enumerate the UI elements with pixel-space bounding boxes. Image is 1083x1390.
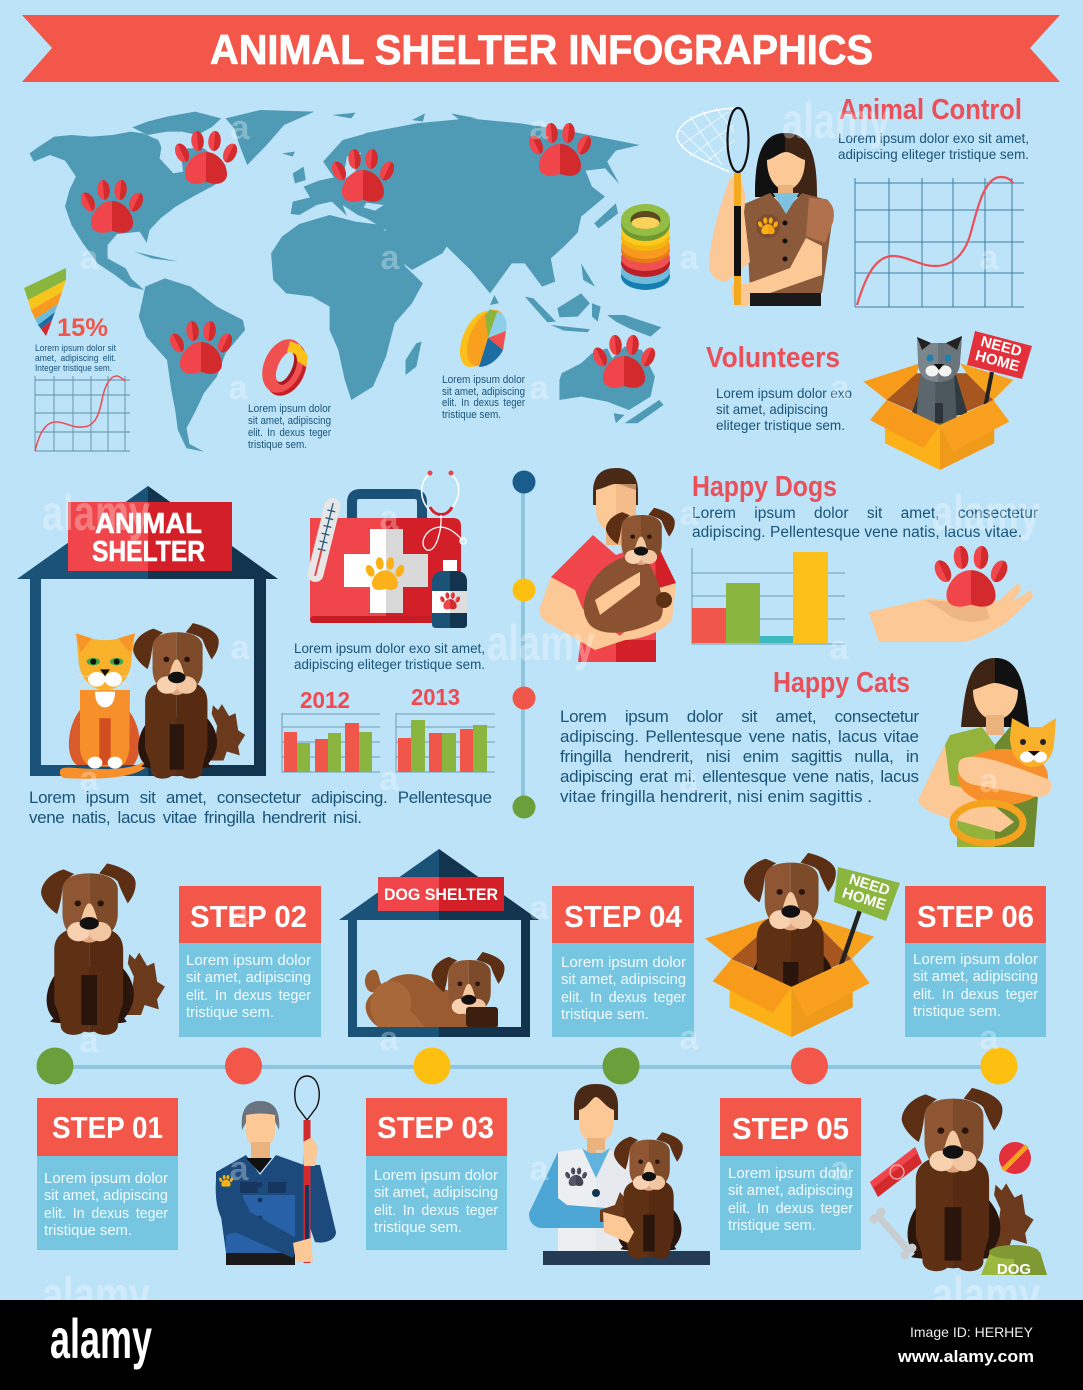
bar chart: 2013: 2013 bbox=[411, 684, 460, 710]
heading: Happy Dogs: Happy Dogs bbox=[692, 471, 837, 503]
watermarks: a bbox=[530, 369, 550, 407]
text: medical kit: Lorem ipsum dolor exo sit amet, bbox=[294, 640, 485, 656]
step 03: STEP 03 bbox=[377, 1110, 494, 1145]
heading: Animal Control: Animal Control bbox=[839, 94, 1022, 126]
step 05: Lorem ipsum dolor bbox=[728, 1166, 853, 1182]
world map bbox=[29, 110, 664, 452]
illustration: medical kit bbox=[306, 470, 467, 628]
watermarks: a bbox=[380, 760, 400, 798]
illustration: man holding dog bbox=[539, 468, 676, 662]
icon: funnel chart bbox=[24, 268, 66, 336]
watermarks: a bbox=[381, 239, 401, 277]
text: pie caption: Lorem ipsum dolor bbox=[442, 374, 525, 386]
illustration: dog in box with sign bbox=[705, 853, 900, 1037]
text: volunteers bbox=[716, 385, 852, 433]
line chart: small bbox=[35, 376, 130, 451]
text: shelter description bbox=[29, 788, 492, 827]
watermarks: a bbox=[680, 1019, 700, 1057]
watermarks: a bbox=[680, 762, 700, 800]
step 01: sit amet, adipiscing bbox=[44, 1188, 168, 1204]
text: ring caption bbox=[248, 403, 331, 451]
watermarks: a bbox=[80, 239, 100, 277]
text: funnel caption: Lorem ipsum dolor sit bbox=[35, 343, 116, 354]
step 05 bbox=[720, 1098, 861, 1250]
text: ring caption: elit. In dexus teger bbox=[248, 427, 331, 439]
illustration: dog shelter bbox=[339, 849, 539, 1037]
step 06: elit. In dexus teger bbox=[913, 987, 1038, 1003]
text: happy cats: vitae fringilla hendrerit, nisi enim sagittis . bbox=[560, 787, 872, 806]
vertical timeline bbox=[512, 470, 536, 818]
illustration: woman holding cat bbox=[918, 658, 1056, 847]
step 06: STEP 06 bbox=[917, 899, 1034, 934]
text: animal control bbox=[838, 130, 1029, 162]
illustration: dog with accessories: DOG bbox=[997, 1261, 1031, 1278]
step 05: sit amet, adipiscing bbox=[728, 1183, 853, 1199]
step 04: Lorem ipsum dolor bbox=[561, 955, 686, 971]
watermarks: alamy bbox=[42, 1267, 150, 1323]
title banner: ANIMAL SHELTER INFOGRAPHICS bbox=[210, 26, 873, 73]
watermarks: a bbox=[680, 239, 700, 277]
illustration: dog shelter: DOG SHELTER bbox=[384, 885, 498, 904]
illustration: animal shelter house: SHELTER bbox=[92, 536, 205, 568]
watermarks: alamy bbox=[932, 485, 1040, 541]
step 04: tristique sem. bbox=[561, 1007, 649, 1023]
icon: red ring chart bbox=[254, 333, 315, 402]
step 01 bbox=[37, 1098, 178, 1250]
map paw markers bbox=[78, 122, 658, 388]
stat: 15%: 15% bbox=[57, 314, 108, 342]
watermarks: a bbox=[380, 1020, 400, 1058]
bar chart: 2012 bbox=[282, 687, 380, 772]
text: ring caption: Lorem ipsum dolor bbox=[248, 403, 331, 415]
step 04 bbox=[552, 886, 694, 1037]
step 06: tristique sem. bbox=[913, 1004, 1001, 1020]
watermarks: a bbox=[530, 109, 550, 147]
footer bar bbox=[0, 1300, 1083, 1390]
icon: pie chart bbox=[452, 304, 513, 373]
text: medical kit: adipiscing eliteger tristique sem. bbox=[294, 656, 485, 672]
footer bar: alamy bbox=[50, 1307, 152, 1370]
heading: Volunteers: Volunteers bbox=[706, 342, 840, 374]
text: pie caption: tristique sem. bbox=[442, 409, 501, 421]
text: ring caption: sit amet, adipiscing bbox=[248, 415, 331, 427]
step 02: sit amet, adipiscing bbox=[186, 970, 311, 986]
watermarks: a bbox=[80, 760, 100, 798]
illustration: orange cat bbox=[60, 633, 150, 779]
step 02 bbox=[179, 886, 321, 1037]
text: funnel caption bbox=[35, 343, 116, 374]
watermarks: a bbox=[230, 894, 250, 932]
text: happy cats: adipiscing. Pellentesque vene natis, lacus vitae bbox=[560, 727, 919, 746]
bar chart: 2012: 2012 bbox=[300, 687, 350, 713]
text: happy cats: fringilla hendrerit, nisi enim sagittis nulla, in bbox=[560, 747, 919, 766]
watermarks: a bbox=[80, 1022, 100, 1060]
watermarks: a bbox=[831, 1150, 851, 1188]
step 03: Lorem ipsum dolor bbox=[374, 1168, 498, 1184]
step 02: STEP 02 bbox=[190, 899, 307, 934]
illustration: animal shelter house: ANIMAL bbox=[95, 508, 202, 540]
step 03: sit amet, adipiscing bbox=[374, 1185, 498, 1201]
illustration: sitting dog bbox=[41, 863, 165, 1035]
step 04: sit amet, adipiscing bbox=[561, 972, 686, 988]
watermarks: a bbox=[231, 109, 251, 147]
text: pie caption bbox=[442, 374, 525, 421]
bar chart: 2013 bbox=[396, 684, 495, 772]
text: animal control: adipiscing eliteger tristique sem. bbox=[838, 146, 1029, 162]
illustration: dog in box with sign: HOME bbox=[840, 885, 888, 914]
step 03: elit. In dexus teger bbox=[374, 1203, 498, 1219]
text: pie caption: sit amet, adipiscing bbox=[442, 386, 525, 398]
illustration: animal shelter house bbox=[17, 486, 278, 776]
icon: hand holding paw bbox=[869, 545, 1033, 642]
text: pie caption: elit. In dexus teger bbox=[442, 397, 525, 409]
step 01: STEP 01 bbox=[52, 1110, 163, 1145]
watermarks: a bbox=[830, 629, 850, 667]
step 02: Lorem ipsum dolor bbox=[186, 953, 311, 969]
text: funnel caption: Integer tristique sem. bbox=[35, 363, 112, 374]
step 01: tristique sem. bbox=[44, 1223, 132, 1239]
watermarks: alamy bbox=[487, 615, 595, 671]
text: volunteers: sit amet, adipiscing bbox=[716, 401, 828, 417]
text: happy cats: Lorem ipsum dolor sit amet, consectetur bbox=[560, 707, 919, 726]
text: happy dogs: adipiscing. Pellentesque vene natis, lacus vitae. bbox=[692, 524, 1022, 541]
illustration: vet with dog bbox=[529, 1084, 710, 1265]
line chart: animal control bbox=[855, 177, 1024, 307]
watermarks: a bbox=[530, 889, 550, 927]
text: happy cats bbox=[560, 707, 919, 806]
icon: stacked rings bbox=[621, 204, 670, 290]
watermarks: a bbox=[980, 1019, 1000, 1057]
illustration: brown dog in shelter bbox=[133, 623, 245, 779]
step 06: Lorem ipsum dolor bbox=[913, 952, 1038, 968]
step 03: tristique sem. bbox=[374, 1220, 462, 1236]
step 05: elit. In dexus teger bbox=[728, 1201, 853, 1217]
step 01: Lorem ipsum dolor bbox=[44, 1171, 168, 1187]
text: volunteers: eliteger tristique sem. bbox=[716, 417, 845, 433]
watermarks: alamy bbox=[42, 485, 150, 541]
step 04: STEP 04 bbox=[564, 899, 683, 934]
watermarks: alamy bbox=[782, 93, 890, 149]
watermarks: a bbox=[980, 762, 1000, 800]
illustration: dog with accessories bbox=[870, 1088, 1047, 1278]
step 05: STEP 05 bbox=[732, 1111, 849, 1146]
illustration: cat in box with sign: NEED bbox=[979, 333, 1024, 360]
text: medical kit bbox=[294, 640, 485, 672]
text: happy cats: adipiscing erat mi. ellentesque vene natis, lacus bbox=[560, 767, 919, 786]
watermarks: a bbox=[680, 495, 700, 533]
text: happy dogs: Lorem ipsum dolor sit amet, consectetur bbox=[692, 505, 1038, 522]
text: animal control: Lorem ipsum dolor exo sit amet, bbox=[838, 130, 1029, 146]
text: volunteers: Lorem ipsum dolor exo bbox=[716, 385, 852, 401]
text: shelter description: Lorem ipsum sit amet, consectetur adipiscing. Pellentesque bbox=[29, 788, 492, 807]
footer bar: www.alamy.com bbox=[897, 1347, 1034, 1366]
text: ring caption: tristique sem. bbox=[248, 439, 307, 451]
bar chart: happy dogs bbox=[692, 548, 845, 644]
title banner bbox=[22, 15, 1060, 82]
footer bar: Image ID: HERHEY bbox=[910, 1324, 1034, 1340]
illustration: cat in box with sign: HOME bbox=[973, 347, 1021, 375]
step 06: sit amet, adipiscing bbox=[913, 969, 1038, 985]
step 01: elit. In dexus teger bbox=[44, 1206, 168, 1222]
text: shelter description: vene natis, lacus vitae fringilla hendrerit nisi. bbox=[29, 808, 362, 827]
horizontal timeline bbox=[36, 1048, 1018, 1084]
illustration: dog in box with sign: NEED bbox=[847, 871, 892, 899]
step 02: elit. In dexus teger bbox=[186, 988, 311, 1004]
heading: Happy Cats: Happy Cats bbox=[773, 667, 910, 699]
watermarks: a bbox=[831, 369, 851, 407]
text: happy dogs bbox=[692, 505, 1038, 541]
text: funnel caption: amet, adipiscing elit. bbox=[35, 353, 116, 364]
illustration: cat in box with sign bbox=[863, 331, 1032, 470]
step 06 bbox=[905, 886, 1046, 1037]
watermarks: a bbox=[530, 1150, 550, 1188]
step 03 bbox=[366, 1098, 507, 1250]
watermarks: a bbox=[380, 499, 400, 537]
watermarks: alamy bbox=[932, 1267, 1040, 1323]
watermarks: a bbox=[230, 1150, 250, 1188]
watermarks: a bbox=[231, 629, 251, 667]
step 04: elit. In dexus teger bbox=[561, 990, 686, 1006]
step 02: tristique sem. bbox=[186, 1005, 274, 1021]
watermarks: a bbox=[980, 239, 1000, 277]
illustration: animal control officer bbox=[216, 1076, 336, 1265]
watermarks: a bbox=[229, 369, 249, 407]
step 05: tristique sem. bbox=[728, 1218, 816, 1234]
illustration: animal control woman bbox=[677, 108, 834, 307]
